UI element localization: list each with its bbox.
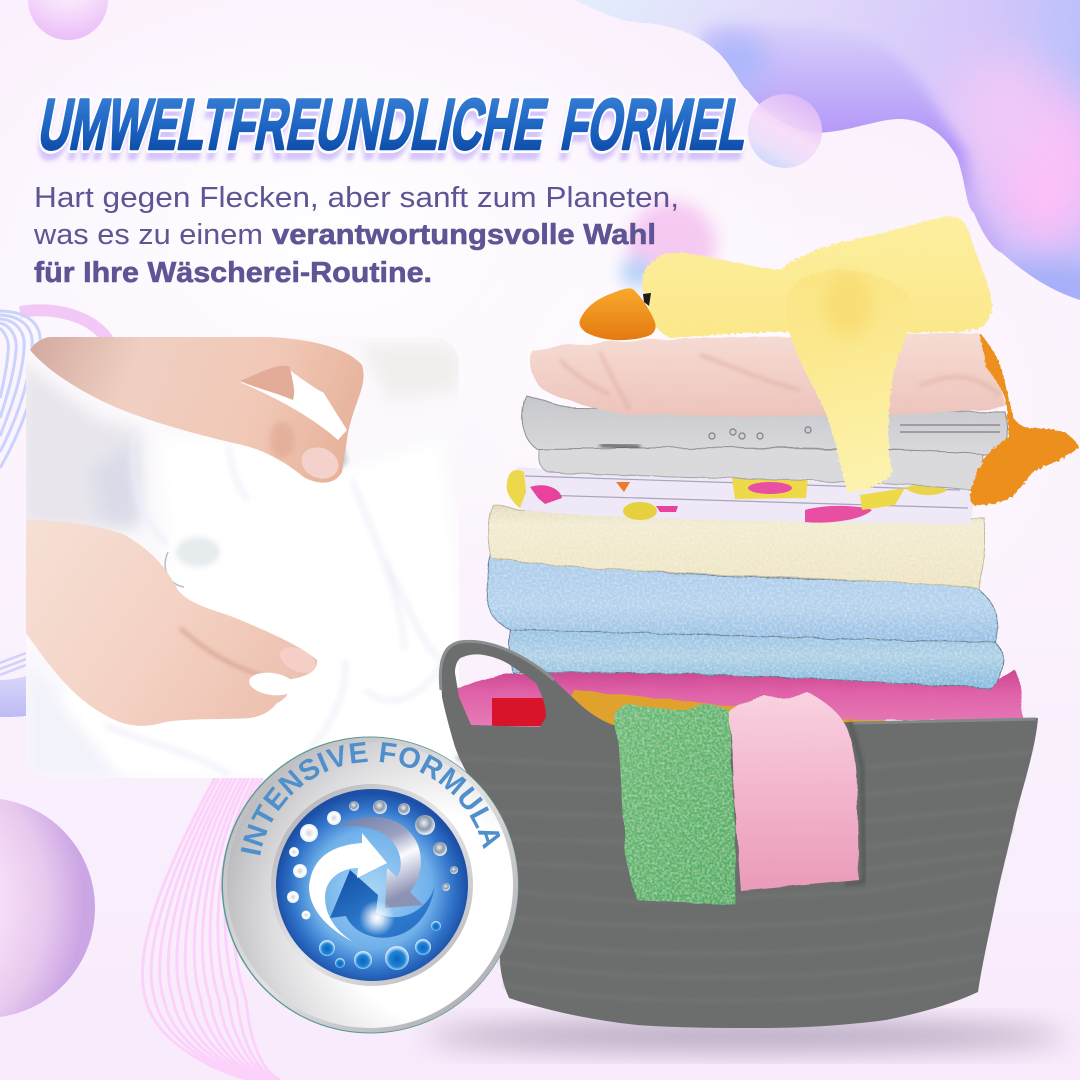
panel: hands washing white cloth — [20, 335, 459, 778]
eye — [643, 293, 651, 306]
subtitle text — [33, 182, 679, 289]
subtitle text: was es zu einem — [33, 219, 263, 251]
magenta towel — [457, 668, 1024, 730]
duck plush — [579, 216, 1078, 505]
cloth pinch — [249, 672, 290, 696]
teal outline — [222, 736, 518, 1034]
title: FORMEL — [556, 85, 756, 165]
title: UMWELTFREUNDLICHE — [33, 85, 554, 165]
orange cloth — [570, 685, 900, 732]
subtitle text: Hart gegen Flecken, aber sanft zum Planeten, — [34, 182, 679, 214]
basket ribs — [456, 752, 1030, 1001]
beak — [579, 288, 656, 340]
knuckle upper — [270, 422, 294, 458]
rim highlight — [853, 719, 1036, 723]
body — [642, 216, 992, 338]
white arrow — [309, 833, 387, 942]
green towel — [613, 705, 736, 905]
orange feet — [970, 333, 1078, 505]
basket body and handle — [440, 641, 1038, 1028]
pink shirt folds — [560, 352, 1000, 410]
bubbles blue — [319, 921, 441, 970]
fingernail upper — [302, 447, 338, 479]
lower hand — [26, 520, 317, 726]
red cloth — [492, 698, 546, 726]
basket shadow — [425, 1022, 1065, 1050]
subtitle text: verantwortungsvolle Wahl — [272, 219, 656, 251]
pink towel shadow — [845, 722, 864, 884]
bubble: top left — [28, 0, 108, 40]
finger shadow lower — [178, 626, 263, 676]
cloth folds — [109, 450, 441, 772]
blue disc — [276, 789, 468, 981]
sparkle — [359, 900, 395, 936]
button shadow — [176, 537, 220, 567]
inner rim — [271, 784, 473, 986]
dark crease — [600, 445, 640, 447]
decorative rings: left — [0, 310, 108, 468]
upper blue towel — [487, 552, 998, 642]
laundry stack — [457, 333, 1024, 732]
wing warm spot — [824, 273, 872, 337]
blurred bubble behind duck — [621, 201, 716, 289]
silver arrow — [338, 817, 423, 908]
printed duck fabric — [506, 467, 974, 525]
title: FORMEL — [556, 85, 756, 165]
bubbles grey — [349, 800, 458, 891]
button ring on cloth — [165, 552, 184, 587]
palm crease — [240, 366, 294, 400]
fingernail lower — [280, 647, 316, 673]
lower blue towel — [509, 625, 1004, 688]
subtitle text: für Ihre Wäscherei-Routine. — [34, 257, 432, 289]
cream blanket — [488, 505, 986, 588]
decorative stripes: pink waves — [142, 778, 280, 1080]
grey shirt print — [709, 425, 1000, 439]
curved label: INTENSIVE FORMULA — [240, 742, 500, 856]
lower grey shirt — [538, 444, 983, 490]
ring face — [227, 742, 513, 1028]
tub water at left — [26, 368, 132, 530]
upper hand — [30, 335, 364, 483]
white cloth — [89, 724, 141, 774]
pink folded shirt — [530, 333, 1005, 416]
title: UMWELTFREUNDLICHE — [33, 85, 554, 165]
blue arrow — [330, 870, 435, 938]
bubbles white — [287, 811, 341, 920]
cloth through hand gap — [240, 368, 347, 440]
title: UMWELTFREUNDLICHE — [31, 95, 552, 175]
wing hanging down — [786, 270, 913, 493]
bubble: beside title — [748, 94, 822, 168]
upper grey shirt — [522, 395, 1007, 456]
badge: intensive formula — [222, 736, 518, 1034]
decorative stripes: lower left — [0, 653, 26, 717]
handle highlight — [440, 641, 554, 690]
laundry basket — [440, 641, 1038, 1028]
title: FORMEL — [554, 95, 754, 175]
outer rim — [223, 738, 518, 1032]
fold beside finger — [342, 446, 350, 470]
top-right wave shape — [570, 0, 1080, 316]
bubble: lower left — [0, 798, 95, 1018]
soft shading — [26, 345, 459, 778]
pink towel — [729, 693, 859, 891]
